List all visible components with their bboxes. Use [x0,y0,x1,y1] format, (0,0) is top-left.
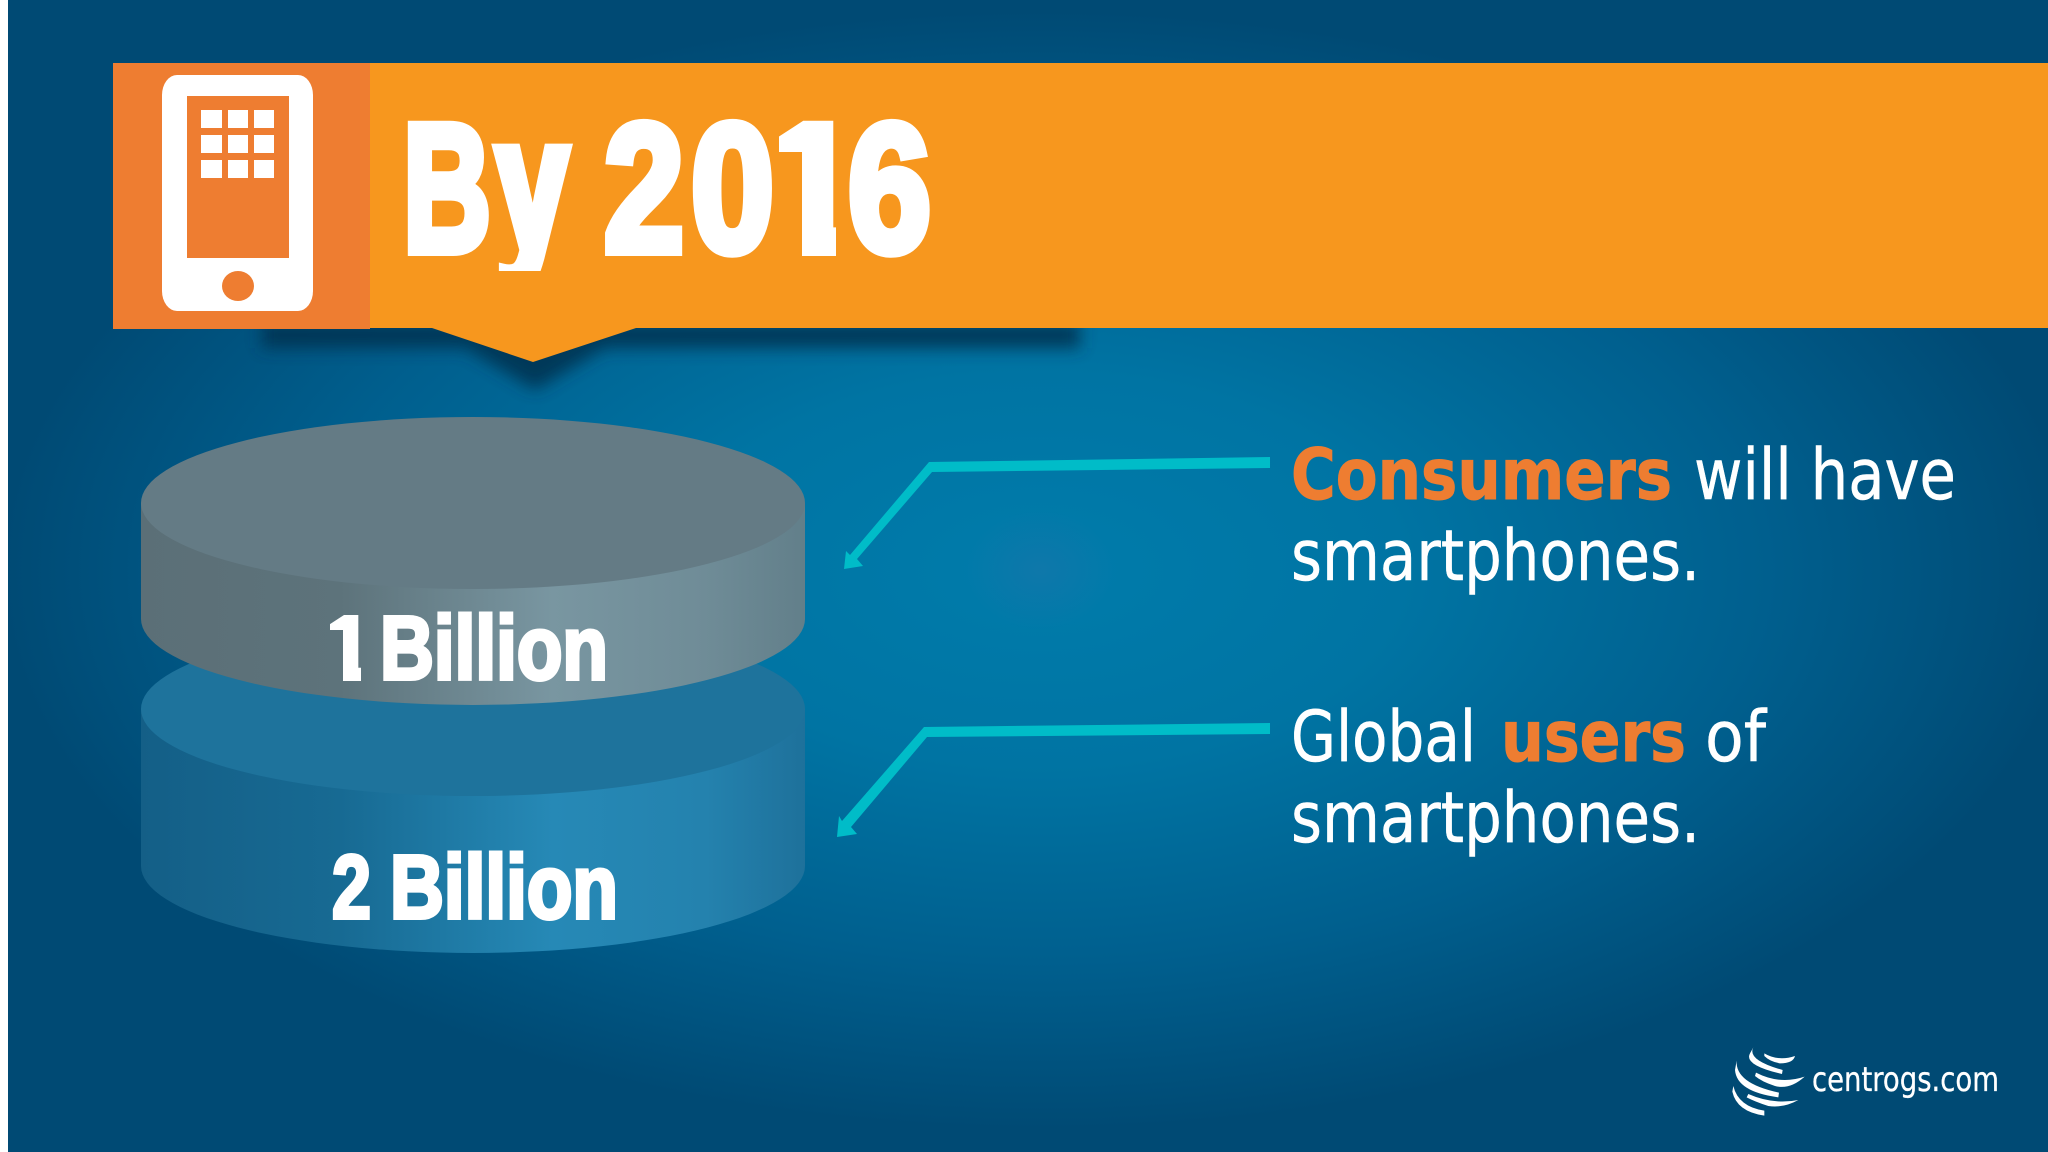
title: 2 [604,86,684,290]
text: consumers [1291,434,1956,597]
label: 2 Billion [332,838,618,938]
upper cylinder: 1 Billion [141,417,805,705]
text: consumers: Consumers [1291,434,1672,516]
text: users [1291,696,1767,859]
label: 2 Billion: Billion [390,838,618,938]
icon: globe swooshes [1732,1047,1805,1116]
logo text: centrogs.com [1812,1060,1999,1100]
title: 0 [691,86,774,290]
text: consumers: will have [1694,434,1956,516]
text: users: smartphones. [1291,777,1700,859]
text: users: users [1501,696,1686,778]
arrow: consumers [844,457,1270,569]
icon: smartphone [162,75,313,311]
title: B [403,86,491,290]
text: consumers: smartphones. [1291,515,1700,597]
label: 1 Billion: Billion [380,599,608,699]
banner shadow [262,322,1080,390]
label: 1 Billion: 1 [323,599,373,699]
title: y [497,80,567,292]
text: users: of [1705,696,1767,778]
lower cylinder: 2 Billion [141,622,805,953]
icon tile [113,63,370,329]
arrow: users [837,723,1270,837]
title: 6 [848,86,931,290]
text: users: Global [1291,696,1476,778]
label: 1 Billion [330,612,605,682]
logo: centrogs.com [1732,1047,1999,1116]
label: 2 Billion: 2 [332,838,371,938]
banner bar with pointer [370,63,2048,362]
title [408,118,930,271]
title: 1 [761,86,862,290]
banner [113,63,2048,362]
